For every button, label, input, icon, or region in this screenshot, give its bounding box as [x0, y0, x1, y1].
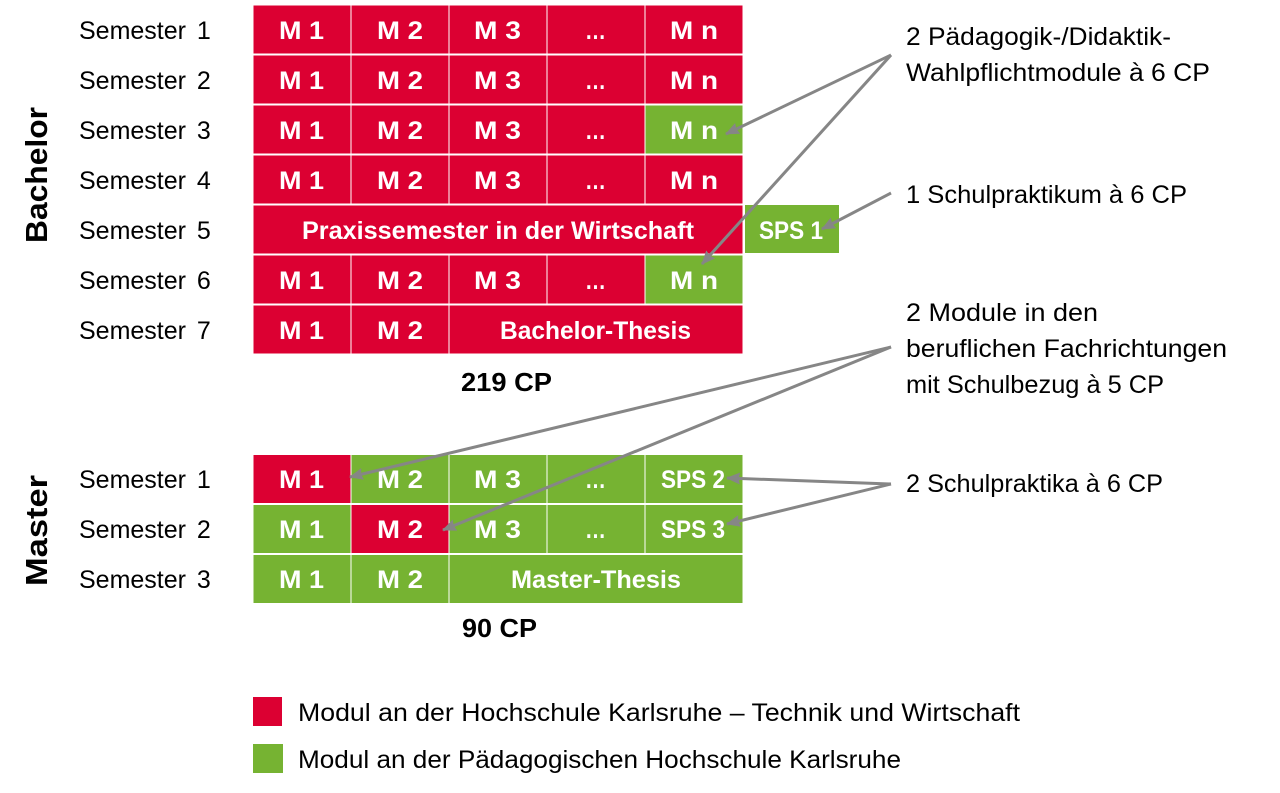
semester labels: Bachelor: Semester 4 — [79, 167, 211, 195]
semester labels: Master: Semester 1 — [79, 466, 211, 494]
row: Bachelor semester 1: M 3 — [474, 17, 521, 45]
semester labels: Bachelor: Semester 1 — [79, 17, 211, 45]
row: Bachelor semester 5: Praxissemester in der Wirtschaft — [302, 217, 695, 245]
row: Bachelor semester 2: M 2 — [377, 67, 423, 95]
row: Bachelor semester 6: M 1 — [279, 267, 324, 295]
row: Master semester 1: M 1 — [279, 466, 324, 494]
row: Bachelor semester 6: M 2 — [377, 267, 423, 295]
row: Master semester 1 — [254, 455, 742, 503]
row: Bachelor semester 4: … — [585, 167, 606, 195]
row: Master semester 1: M 3 — [474, 466, 521, 494]
row: Master semester 1: … — [585, 466, 606, 494]
callout: Wahlpflichtmodule — [906, 23, 1210, 87]
row: Bachelor semester 6: … — [585, 267, 606, 295]
row: Bachelor semester 3: M 3 — [474, 117, 521, 145]
row: Master semester 3 — [254, 555, 742, 603]
callout: berufliche Fachrichtungen: 2 Module in den — [906, 299, 1098, 327]
row: Bachelor semester 3: M 1 — [279, 117, 324, 145]
row: Master semester 3: M 2 — [377, 566, 423, 594]
total: 219 CP: 219 CP — [461, 367, 552, 397]
row: Bachelor semester 7: M 1 — [279, 317, 324, 345]
semester labels: Bachelor: Semester 3 — [79, 117, 211, 145]
arrows: berufliche Fachrichtungen — [350, 347, 891, 530]
row: Master semester 3: M 1 — [279, 566, 324, 594]
callout: berufliche Fachrichtungen — [906, 299, 1227, 399]
row: Bachelor semester 2: M 1 — [279, 67, 324, 95]
row: Bachelor semester 6: M 3 — [474, 267, 521, 295]
semester labels: Bachelor: Semester 6 — [79, 267, 211, 295]
row: Master semester 1: SPS 2 — [661, 466, 725, 494]
heading: Bachelor: Bachelor — [19, 107, 54, 243]
row: Bachelor semester 6: M n — [670, 267, 718, 295]
callout: Wahlpflichtmodule: Wahlpflichtmodule à 6 CP — [906, 59, 1210, 87]
total: 90 CP: 90 CP — [462, 613, 537, 643]
row: Bachelor semester 2: … — [585, 67, 606, 95]
row: Bachelor semester 5 — [254, 205, 839, 254]
row: Bachelor semester 2: M n — [670, 67, 718, 95]
row: Bachelor semester 4: M n — [670, 167, 718, 195]
row: Master semester 2 — [254, 505, 742, 553]
row: Bachelor semester 1: M 2 — [377, 17, 423, 45]
row: Bachelor semester 2: M 3 — [474, 67, 521, 95]
row: Bachelor semester 7 — [254, 306, 742, 354]
semester labels: Master: Semester 3 — [79, 566, 211, 594]
semester labels: Bachelor: Semester 2 — [79, 67, 211, 95]
callout: berufliche Fachrichtungen: mit Schulbezug à 5 CP — [906, 371, 1164, 399]
row: Bachelor semester 1 — [254, 6, 742, 54]
row: Bachelor semester 3: M 2 — [377, 117, 423, 145]
module grid: Bachelor — [254, 6, 839, 354]
row: Bachelor semester 4: M 3 — [474, 167, 521, 195]
row: Bachelor semester 3: M n — [670, 117, 718, 145]
legend item: Hochschule Karlsruhe: Modul an der Hochschule Karlsruhe – Technik und Wirtschaft — [298, 699, 1020, 727]
semester labels: Bachelor — [79, 17, 211, 345]
arrows: Schulpraktika — [727, 478, 891, 524]
semester labels: Master: Semester 2 — [79, 516, 211, 544]
row: Master semester 2: M 3 — [474, 516, 521, 544]
row: Bachelor semester 7: Bachelor-Thesis — [500, 317, 691, 345]
arrow: Schulpraktikum — [822, 193, 891, 229]
row: Bachelor semester 1: M n — [670, 17, 718, 45]
row: Bachelor semester 1: M 1 — [279, 17, 324, 45]
row: Bachelor semester 4 — [254, 156, 742, 204]
row: Bachelor semester 7: M 2 — [377, 317, 423, 345]
row: Bachelor semester 3 — [254, 106, 742, 154]
row: Master semester 2: … — [585, 516, 606, 544]
row: Master semester 2: M 1 — [279, 516, 324, 544]
arrows: Wahlpflichtmodule — [702, 55, 891, 264]
semester labels: Master — [79, 466, 211, 594]
row: Bachelor semester 1: … — [585, 17, 606, 45]
row: Bachelor semester 5: SPS 1 — [759, 217, 823, 245]
row: Bachelor semester 6 — [254, 256, 742, 304]
row: Master semester 3: Master-Thesis — [511, 566, 681, 594]
row: Master semester 1: M 2 — [377, 466, 423, 494]
row: Bachelor semester 4: M 2 — [377, 167, 423, 195]
legend item: Pädagogische Hochschule: Modul an der Pädagogischen Hochschule Karlsruhe — [298, 746, 901, 774]
row: Master semester 2: M 2 — [377, 516, 423, 544]
heading: Master: Master — [19, 475, 54, 586]
row: Bachelor semester 3: … — [585, 117, 606, 145]
callout: Wahlpflichtmodule: 2 Pädagogik-/Didaktik- — [906, 23, 1171, 51]
module grid: Master — [254, 455, 742, 603]
semester labels: Bachelor: Semester 5 — [79, 217, 211, 245]
legend — [253, 697, 1020, 774]
row: Bachelor semester 2 — [254, 56, 742, 104]
row: Master semester 2: SPS 3 — [661, 516, 725, 544]
semester labels: Bachelor: Semester 7 — [79, 317, 211, 345]
callout: berufliche Fachrichtungen: beruflichen Fachrichtungen — [906, 335, 1227, 363]
row: Bachelor semester 4: M 1 — [279, 167, 324, 195]
callout: Schulpraktika: 2 Schulpraktika à 6 CP — [906, 470, 1163, 498]
callout: Schulpraktikum: 1 Schulpraktikum à 6 CP — [906, 181, 1187, 209]
